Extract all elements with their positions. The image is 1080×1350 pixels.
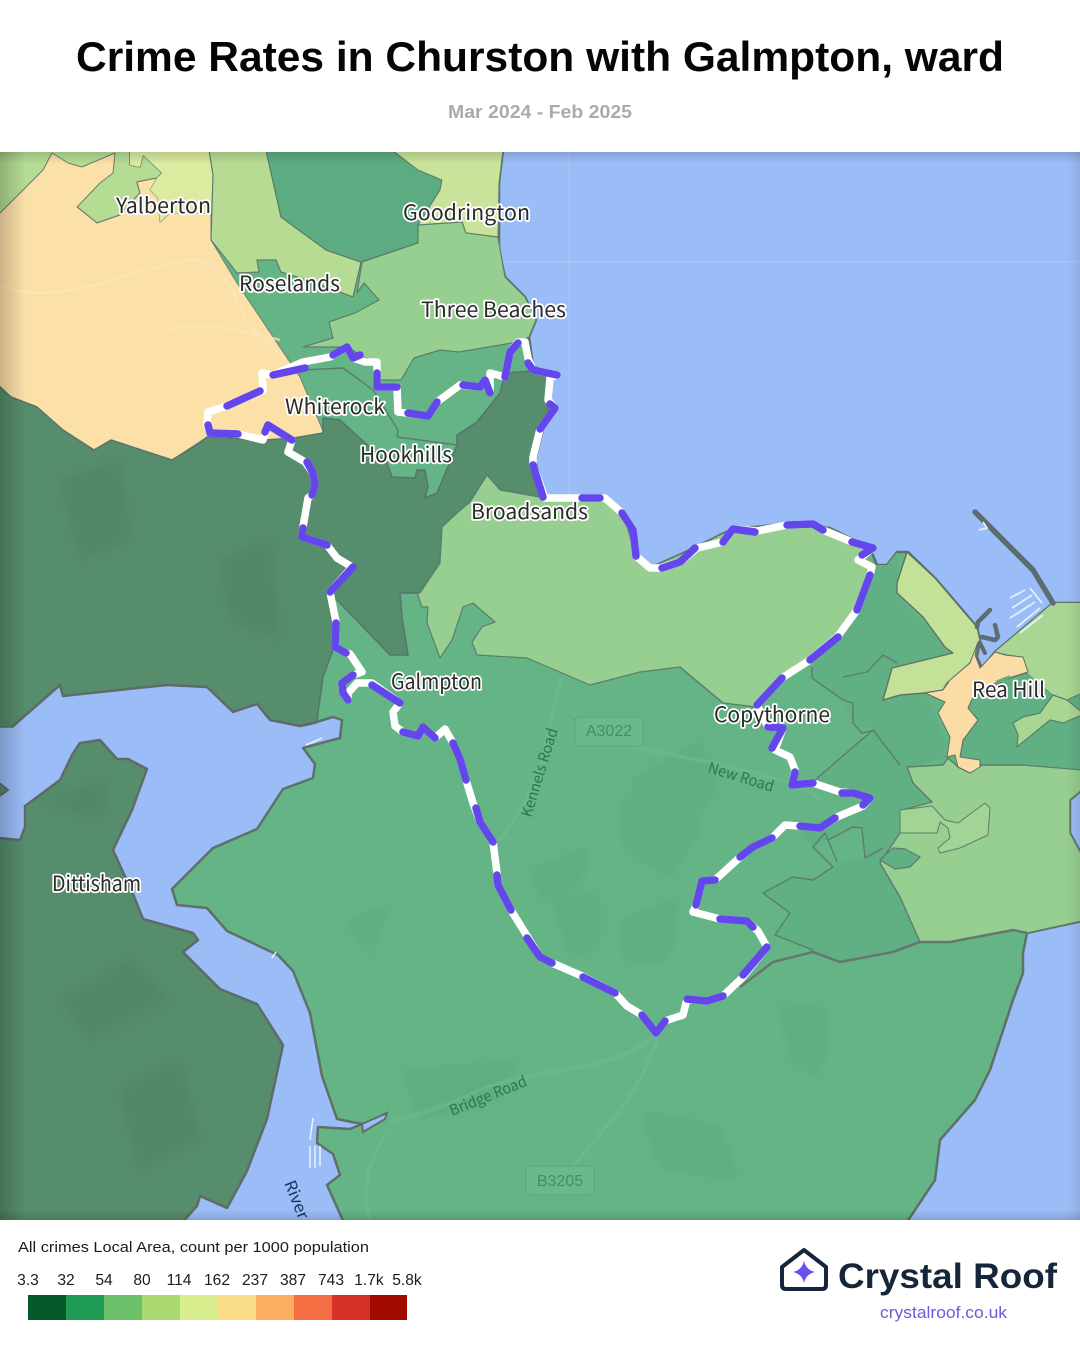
legend values: 32 xyxy=(57,1272,75,1289)
marina pontoons xyxy=(979,522,1043,633)
road shield: A3022: A3022 xyxy=(586,723,632,740)
land: mid green base area xyxy=(170,152,1080,1220)
legend values: 80 xyxy=(133,1272,151,1289)
lighter inner patch xyxy=(900,803,990,853)
legend values: 387 xyxy=(280,1272,306,1289)
legend xyxy=(17,1239,422,1320)
place label: Dittisham: Dittisham xyxy=(52,868,141,898)
east green wedge xyxy=(1067,693,1080,712)
map edge shading xyxy=(0,152,1080,1220)
tan high crime area: west xyxy=(0,153,324,460)
legend values: 3.3 xyxy=(17,1272,39,1289)
place label: Copythorne: Copythorne xyxy=(714,699,830,729)
subtitle: date range: Mar 2024 - Feb 2025 xyxy=(448,101,632,122)
legend values: 5.8k xyxy=(392,1272,422,1289)
roads xyxy=(420,754,707,1114)
legend values: 1.7k xyxy=(354,1272,384,1289)
place label: Broadsands: Broadsands xyxy=(471,496,588,526)
east green block xyxy=(960,673,1080,770)
road label: Kennels Road: Kennels Road xyxy=(516,725,563,819)
light green: Roselands xyxy=(209,150,361,297)
green fleck inside Rea Hill xyxy=(995,675,1010,683)
legend values: 162 xyxy=(204,1272,230,1289)
legend values: 114 xyxy=(167,1272,192,1289)
east darker green districts xyxy=(876,552,898,566)
logo: Crystal Roof xyxy=(782,1250,1057,1322)
ward boundary: purple dashes xyxy=(208,343,873,1033)
legend values: 54 xyxy=(95,1272,113,1289)
yellow green area: north xyxy=(130,150,213,222)
place label: Hookhills: Hookhills xyxy=(360,439,452,469)
islet xyxy=(0,782,8,797)
tan roads xyxy=(0,260,285,360)
water xyxy=(0,152,1080,1220)
place label: Roselands: Roselands xyxy=(239,268,340,298)
light green corner and Yalberton xyxy=(0,150,162,223)
legend colour scale xyxy=(28,1295,407,1320)
small green patch xyxy=(880,848,920,869)
legend values xyxy=(17,1272,422,1289)
river moorings xyxy=(272,738,322,1168)
website: crystalroof.co.uk xyxy=(880,1304,1008,1322)
place label: Rea Hill: Rea Hill xyxy=(972,674,1045,704)
road label: New Road: New Road xyxy=(706,757,777,797)
place label: Galmpton: Galmpton xyxy=(391,666,482,696)
deeper green: north centre xyxy=(266,150,442,262)
yellow green: north of Rea Hill xyxy=(883,552,980,700)
road shield: B3205: B3205 xyxy=(537,1173,583,1190)
district boundaries xyxy=(303,368,900,950)
light green: far east upper xyxy=(995,603,1080,700)
light green: far east tail xyxy=(1013,695,1080,747)
water tile seams xyxy=(505,152,1080,500)
legend values: 743 xyxy=(318,1272,344,1289)
south boundary line xyxy=(740,930,1027,987)
terrain patches xyxy=(345,740,830,1180)
dark green west and central area xyxy=(0,370,548,727)
light green: Broadsands xyxy=(417,475,873,707)
place label: Whiterock: Whiterock xyxy=(285,391,385,421)
harbour pier and breakwaters xyxy=(975,512,1053,653)
road shield: B3205 xyxy=(526,1166,594,1195)
legend heading: All crimes Local Area, count per 1000 population xyxy=(18,1239,369,1256)
river label: River Dart xyxy=(279,1176,331,1257)
logo wordmark: Crystal Roof xyxy=(838,1257,1057,1296)
place label: Goodrington: Goodrington xyxy=(403,197,530,227)
dark green peninsula: Dittisham xyxy=(0,740,283,1225)
legend values: 237 xyxy=(242,1272,268,1289)
road label: Bridge Road: Bridge Road xyxy=(446,1070,530,1121)
ward boundary: white base line xyxy=(207,342,873,1033)
icon: house with star xyxy=(782,1250,826,1289)
title: Crime Rates in Churston with Galmpton, ward xyxy=(76,33,1004,80)
place label: Three Beaches: Three Beaches xyxy=(421,294,566,324)
place label: Yalberton: Yalberton xyxy=(115,190,211,220)
tan: Rea Hill xyxy=(925,642,1028,773)
estuary shoreline xyxy=(12,685,317,727)
lagoon xyxy=(362,1113,387,1132)
light green: south-east xyxy=(880,757,1080,942)
road shield: A3022 xyxy=(575,717,643,746)
light green: Three Beaches xyxy=(303,222,536,380)
yellow green: Goodrington xyxy=(392,150,503,237)
